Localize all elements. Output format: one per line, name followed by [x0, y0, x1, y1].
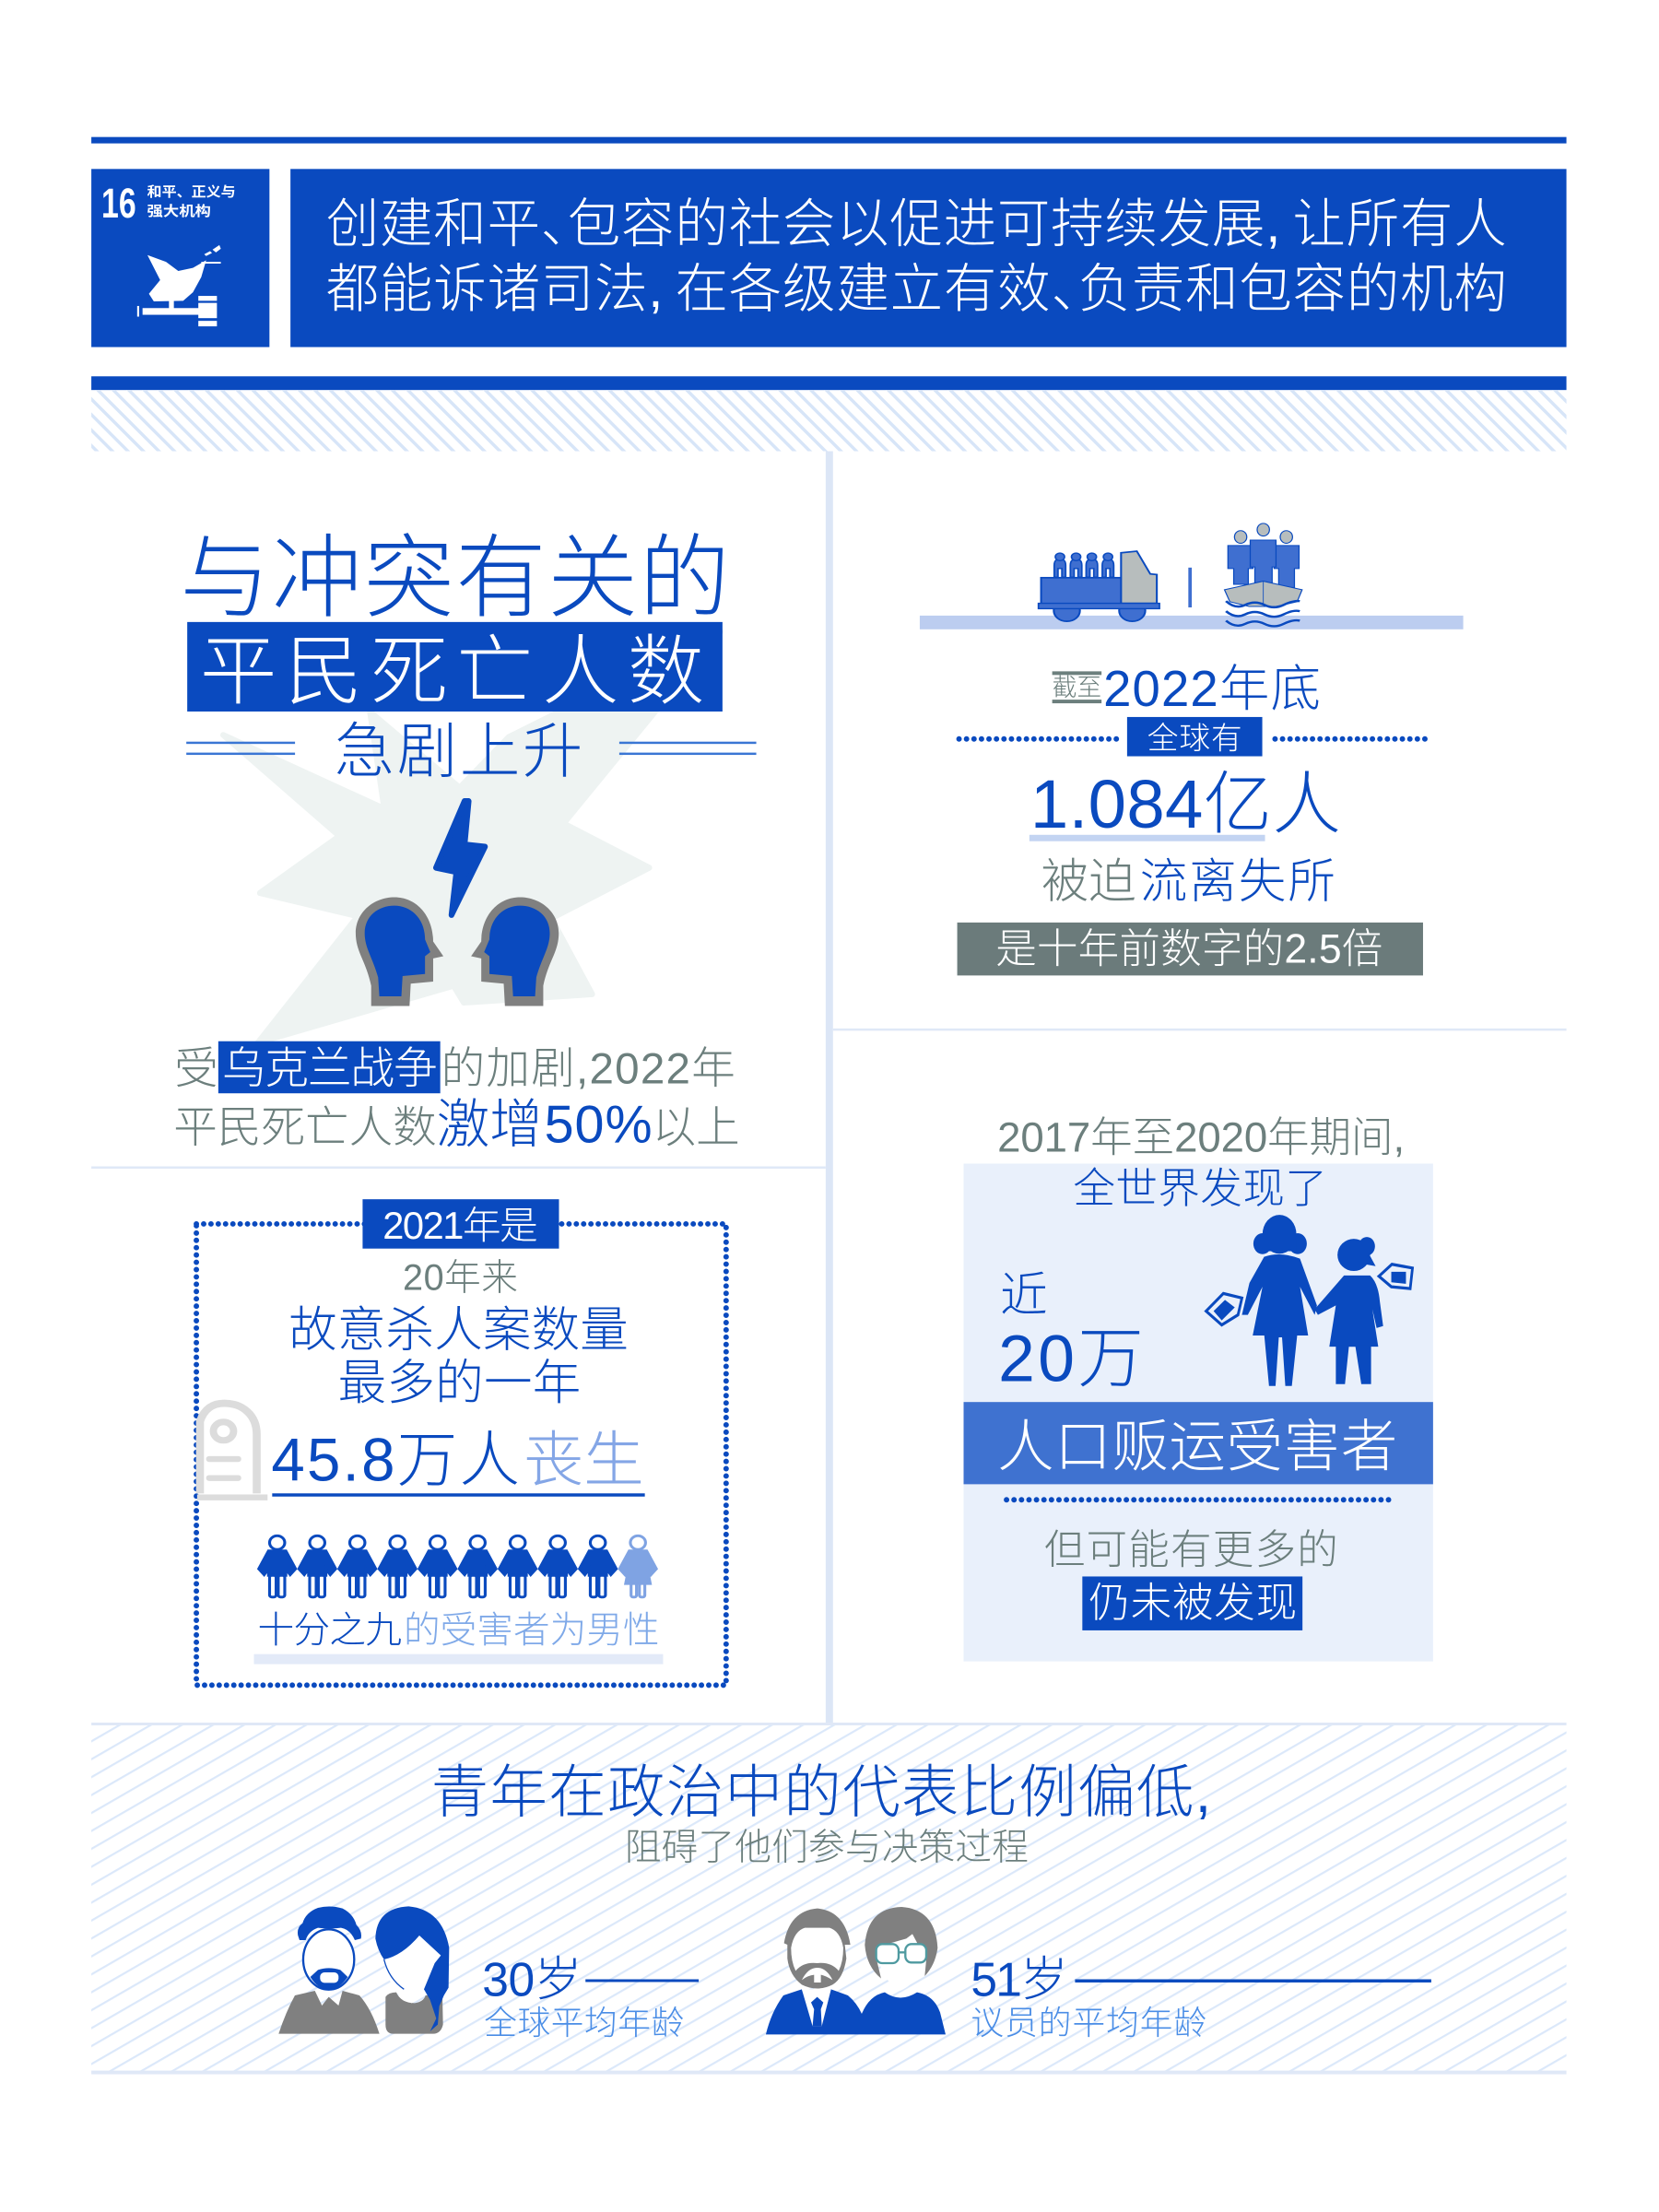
goal title banner: ,: [1265, 195, 1281, 254]
stat: nearly 200k: 20万: [998, 1322, 1144, 1395]
stat: 458k: 丧生: [524, 1426, 644, 1493]
text: period: 2017年至2020年期间,: [997, 1114, 1405, 1161]
text: most homicides: 最多的一年: [338, 1356, 581, 1410]
paragraph: ukraine war: 受: [174, 1044, 218, 1093]
paragraph: ukraine war: 的加剧,2022年: [441, 1044, 735, 1093]
stat: nearly 200k: 近: [1000, 1268, 1048, 1322]
paragraph: ukraine war: 激增: [437, 1096, 543, 1155]
text: forcibly displaced: 流离失所: [1140, 854, 1335, 908]
displaced figures and text: [959, 524, 1427, 908]
goal title banner: 创建和平: [326, 195, 541, 254]
icon: burst background: [223, 631, 721, 1042]
goal title banner: 让所有人: [1292, 195, 1508, 254]
paragraph: ukraine war: 50%: [545, 1096, 653, 1155]
goal 16 icon: [91, 169, 269, 347]
panel: trafficking: [964, 1114, 1433, 1662]
caption: global average: 全球平均年龄: [484, 2005, 684, 2041]
stat: 458k: 45.8万人: [271, 1426, 520, 1493]
heading: 青年在政治中的代表比例偏低,: [431, 1760, 1211, 1825]
goal title banner: 、: [1051, 260, 1105, 319]
text: forcibly displaced: 被迫: [1041, 854, 1136, 908]
paragraph: ukraine war: [173, 1041, 740, 1155]
stat: 108.4 million: 1.084亿人: [1030, 766, 1341, 842]
road: [920, 616, 1464, 629]
heading line 3: 急剧上升: [335, 717, 582, 784]
paragraph: ukraine war: 以上: [653, 1104, 740, 1153]
panel: civilian deaths: [173, 527, 757, 1155]
goal title banner: [290, 169, 1567, 347]
goal title banner: 负责和包容的机构: [1078, 260, 1508, 319]
text: likely more: 但可能有更多的: [1044, 1528, 1338, 1573]
label: globally: [959, 717, 1427, 757]
panel: homicide: [196, 1199, 726, 1685]
date line: 2022年底: [1103, 661, 1321, 717]
stat: 458k: [271, 1426, 645, 1497]
label: 2021: [362, 1199, 559, 1249]
subheading: 阻碍了他们参与决策过程: [625, 1828, 1029, 1868]
icon: woman and child with tags: [1206, 1215, 1413, 1386]
callout: 2.5 times: 是十年前数字的2.5倍: [995, 927, 1382, 972]
hatched band: [91, 1723, 1567, 2075]
goal title banner: 都能诉诸司法: [326, 260, 648, 319]
goal title banner: 包容的社会以促进可持续发展: [568, 195, 1265, 254]
top rule: [91, 137, 1567, 144]
paragraph: ukraine war: 乌克兰战争: [222, 1044, 438, 1093]
text: most homicides: 故意杀人案数量: [288, 1303, 629, 1358]
caption: nine tenths male: 的受害者为男性: [404, 1610, 660, 1651]
icon: lightning and two heads: [356, 801, 559, 1006]
band: trafficking victims: 人口贩运受害者: [997, 1416, 1397, 1479]
label: 2021: 2021年是: [382, 1204, 538, 1247]
icon: tombstone: [197, 1404, 267, 1500]
text: world found: 全世界发现了: [1073, 1165, 1327, 1212]
text: forcibly displaced: [1041, 854, 1335, 908]
date line: 截至: [1053, 674, 1101, 701]
icon: young man and woman: [278, 1906, 449, 2034]
text: most homicides: [288, 1303, 629, 1410]
panel: displaced people: [920, 524, 1464, 975]
panel: youth representation: [91, 1723, 1567, 2075]
caption: nine tenths male: [253, 1610, 663, 1665]
goal title banner: ,: [648, 260, 664, 319]
goal 16 icon: 和平、正义与: [147, 184, 236, 200]
label: globally: 全球有: [1147, 722, 1242, 757]
dotted frame: [196, 1224, 726, 1685]
stat: nearly 200k: [998, 1268, 1144, 1395]
band: trafficking victims: [964, 1402, 1433, 1484]
dotted divider: [1006, 1497, 1393, 1502]
stat: 51 years: 51岁: [971, 1952, 1067, 2006]
stat: 51 years: [971, 1952, 1431, 2006]
paragraph: ukraine war: 平民死亡人数: [173, 1104, 437, 1153]
stat: 30 years: 30岁: [482, 1952, 582, 2006]
icon: ten people row: [259, 1535, 656, 1597]
caption: nine tenths male: 十分之九: [257, 1610, 402, 1651]
caption: parliament average: 议员的平均年龄: [971, 2005, 1206, 2041]
label: undetected: 仍未被发现: [1088, 1581, 1297, 1626]
icon: truck and boat: [1039, 524, 1302, 626]
goal 16 icon: 16: [101, 180, 136, 227]
icon: older man and woman: [766, 1907, 946, 2034]
heading line 1: 与冲突有关的: [180, 527, 730, 629]
text: 20 years: 20年来: [403, 1257, 518, 1298]
heading line 2 on blue bar: 平民死亡人数: [200, 629, 704, 714]
goal title banner: 在各级建立有效: [676, 260, 1051, 319]
box background: [964, 1164, 1433, 1662]
header rule: [91, 376, 1567, 390]
goal 16 icon: 强大机构: [147, 203, 211, 219]
goal title banner: 、: [541, 195, 594, 254]
